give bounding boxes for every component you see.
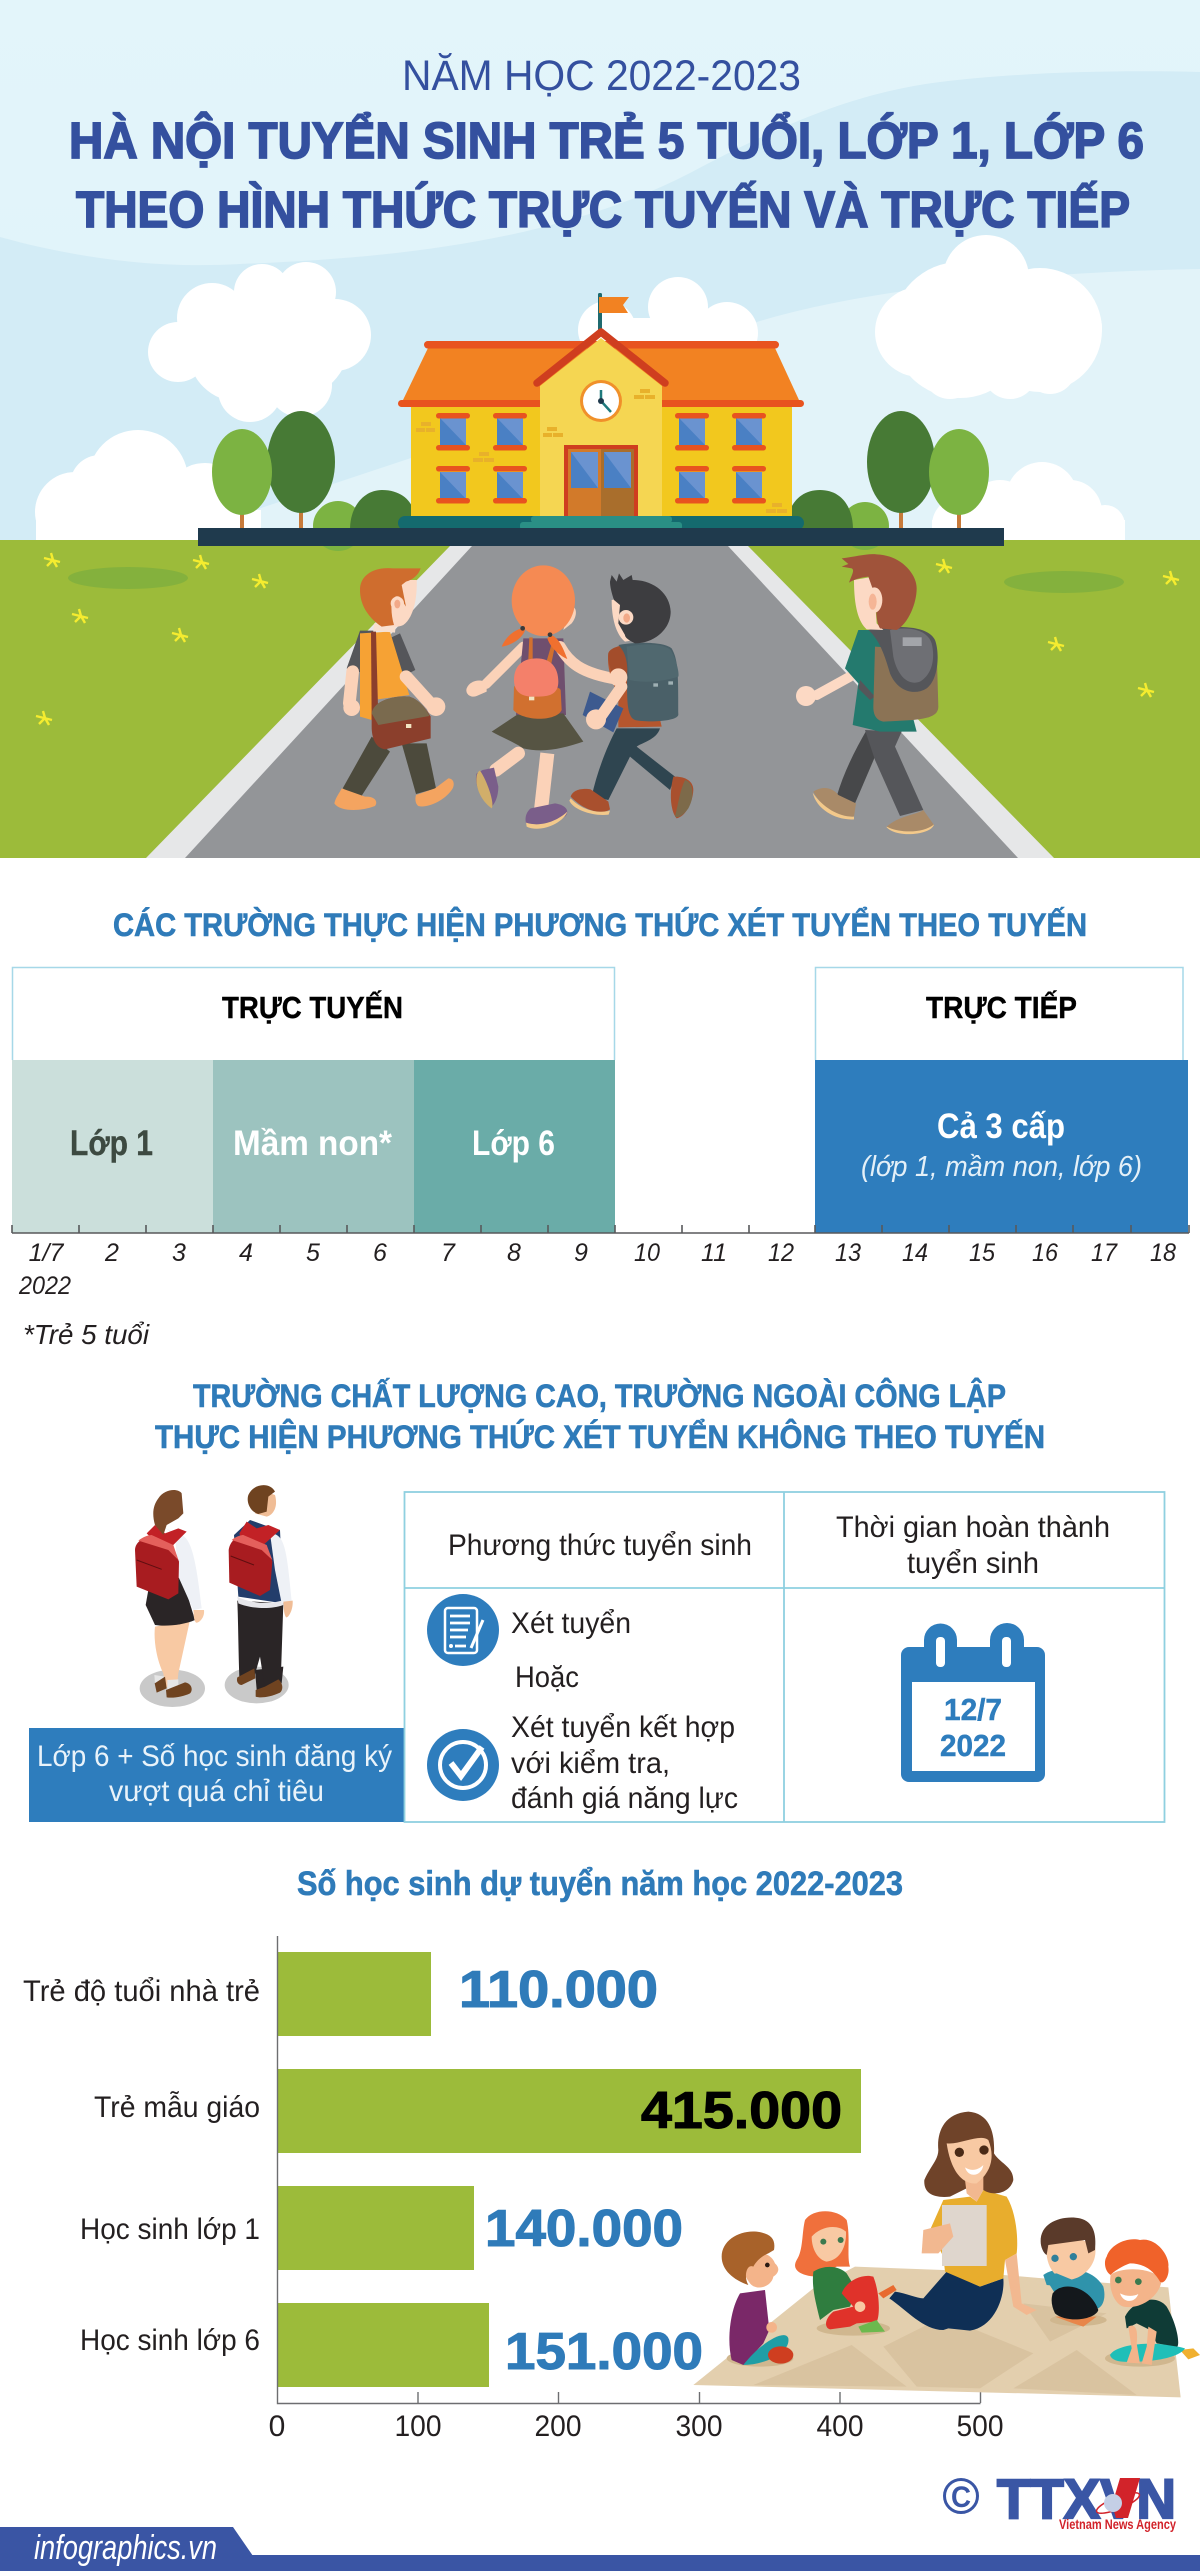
table header: method: Phương thức tuyển sinh: [448, 1529, 752, 1562]
bar: grade 1: [80, 2186, 683, 2270]
timeline dates: 15: [969, 1239, 995, 1267]
copyright mark: [944, 2480, 978, 2514]
footer band: [0, 2527, 1200, 2571]
student: boy with orange hair: [334, 568, 454, 810]
x axis labels: 400: [816, 2410, 864, 2443]
bar: grade 1: [12, 1060, 213, 1233]
timeline dates: 9: [574, 1239, 588, 1267]
bar: preschool: Mầm non*: [233, 1124, 392, 1163]
bar: preschool: [213, 1060, 414, 1233]
timeline dates: 1/7: [29, 1239, 64, 1267]
bar: grade 6: [414, 1060, 615, 1233]
timeline dates: 16: [1032, 1239, 1058, 1267]
panel: online admission timeline: [12, 968, 615, 1233]
icon: calendar with deadline: 12/7: [944, 1692, 1002, 1727]
x axis labels: [269, 2410, 1004, 2443]
wordmark: TTXVN: [997, 2467, 1176, 2530]
icon: document: [427, 1594, 499, 1666]
bar: all three levels: [815, 1060, 1188, 1233]
section heading: by zone: CÁC TRƯỜNG THỰC HIỆN PHƯƠNG THỨC XÉT TUYỂN THEO TUYẾN: [113, 907, 1087, 943]
bar: kindergarten: 415.000: [641, 2082, 842, 2140]
method: direct review: Xét tuyển: [511, 1607, 631, 1640]
icon: check mark: [427, 1729, 499, 1801]
x axis labels: 100: [394, 2410, 442, 2443]
x axis labels: 200: [534, 2410, 582, 2443]
table header: deadline: Thời gian hoàn thành: [836, 1511, 1110, 1544]
cloud: lower right: [932, 462, 1125, 553]
timeline dates: 12: [768, 1239, 794, 1267]
label: online: TRỰC TUYẾN: [222, 990, 403, 1025]
footer site name: infographics.vn: [34, 2529, 217, 2567]
callout: grade 6 oversubscribed: vượt quá chỉ tiêu: [109, 1775, 324, 1808]
student: boy with black hair: [569, 573, 693, 818]
icon: calendar with deadline: [901, 1623, 1045, 1782]
illustration: two students with red backpacks: [135, 1485, 293, 1707]
title line 1: HÀ NỘI TUYỂN SINH TRẺ 5 TUỔI, LỚP 1, LỚP 6: [69, 111, 1144, 169]
cloud: lower left: [35, 430, 261, 552]
trees left: [212, 411, 413, 551]
child: girl in green: [795, 2211, 897, 2336]
timeline dates: 11: [701, 1239, 727, 1267]
x axis labels: 500: [956, 2410, 1004, 2443]
red V stroke and globe emblem: [1094, 2478, 1142, 2518]
x axis labels: 0: [269, 2410, 285, 2443]
timeline dates: 7: [441, 1239, 456, 1267]
chart axes: [278, 1936, 980, 2404]
timeline dates: [18, 1239, 1176, 1300]
bar: grade 1: Lớp 1: [70, 1124, 153, 1163]
table: admission method and deadline: [404, 1492, 1165, 1822]
x axis labels: 300: [676, 2410, 722, 2443]
cloud: behind school: [578, 277, 758, 364]
child: boy in teal sweater: [1041, 2218, 1107, 2327]
bar: grade 6: [80, 2303, 703, 2387]
cloud: upper right: [875, 235, 1102, 399]
timeline dates: 17: [1091, 1239, 1118, 1267]
callout: grade 6 oversubscribed: Lớp 6 + Số học sinh đăng ký: [37, 1740, 392, 1773]
bar: grade 1: 140.000: [485, 2200, 683, 2258]
bar: nursery: [23, 1952, 658, 2036]
footnote: *Trẻ 5 tuổi: [23, 1319, 150, 1350]
student: boy with teal shirt: [796, 554, 938, 834]
timeline dates: 14: [902, 1239, 928, 1267]
bar chart: number of applicants: [23, 1936, 1004, 2443]
timeline dates: 4: [239, 1239, 253, 1267]
grass patches: [68, 567, 1124, 593]
teacher: [889, 2112, 1037, 2331]
copyright mark: C: [951, 2481, 971, 2514]
method: or: Hoặc: [515, 1661, 579, 1694]
label: in person: TRỰC TIẾP: [926, 990, 1077, 1025]
timeline dates: 10: [634, 1239, 660, 1267]
timeline dates: 5: [306, 1239, 320, 1267]
callout: grade 6 oversubscribed: [29, 1728, 404, 1822]
logo: TTXVN: [944, 2467, 1176, 2532]
title line: school year: NĂM HỌC 2022-2023: [402, 52, 801, 100]
timeline dates: 2022: [18, 1272, 71, 1300]
section heading: high quality schools: THỰC HIỆN PHƯƠNG THỨC XÉT TUYỂN KHÔNG THEO TUYẾN: [155, 1419, 1045, 1455]
bar: nursery: Trẻ độ tuổi nhà trẻ: [23, 1975, 260, 2008]
trees right: [790, 411, 989, 550]
road: [146, 546, 1054, 858]
timeline dates: 8: [507, 1239, 521, 1267]
timeline dates: 18: [1150, 1239, 1176, 1267]
grass: [0, 540, 1200, 858]
child: boy in purple: [722, 2231, 793, 2367]
timeline dates: 2: [104, 1239, 119, 1267]
timeline dates: 13: [835, 1239, 861, 1267]
icon: calendar with deadline: 2022: [940, 1728, 1006, 1763]
method: combined review: [511, 1711, 738, 1815]
bar: grade 1: Học sinh lớp 1: [80, 2213, 260, 2246]
timeline axis: [12, 1225, 1189, 1233]
child: boy with orange curly hair: [1105, 2239, 1200, 2367]
panel: in-person admission: [815, 968, 1188, 1233]
table header: deadline: [836, 1511, 1110, 1580]
method: combined review: đánh giá năng lực: [511, 1782, 738, 1815]
school door: [564, 445, 638, 517]
bar: grade 6: 151.000: [505, 2323, 703, 2381]
bar: all three levels: (lớp 1, mầm non, lớp 6): [861, 1151, 1142, 1183]
method: combined review: Xét tuyển kết hợp: [511, 1711, 735, 1744]
timeline dates: 3: [172, 1239, 186, 1267]
table header: deadline: tuyển sinh: [907, 1547, 1039, 1580]
bar: kindergarten: [94, 2069, 861, 2153]
illustration: teacher and children on rug: [693, 2112, 1200, 2397]
school building: [198, 293, 1004, 546]
method: combined review: với kiểm tra,: [511, 1747, 670, 1780]
main title: [69, 52, 1144, 238]
bar: grade 6: Học sinh lớp 6: [80, 2324, 260, 2357]
bar: grade 6: Lớp 6: [472, 1124, 555, 1163]
flowers: [36, 553, 1179, 725]
timeline dates: 6: [373, 1239, 387, 1267]
student: girl with orange hair: [466, 565, 618, 829]
section heading: high quality schools: TRƯỜNG CHẤT LƯỢNG CAO, TRƯỜNG NGOÀI CÔNG LẬP: [193, 1378, 1006, 1414]
section heading: high quality schools: [155, 1378, 1045, 1455]
tagline: Vietnam News Agency: [1059, 2517, 1176, 2532]
bar: kindergarten: Trẻ mẫu giáo: [94, 2091, 260, 2124]
cloud: upper left: [148, 262, 371, 422]
school windows: [436, 413, 766, 504]
bar: nursery: 110.000: [459, 1961, 658, 2019]
bar: all three levels: Cả 3 cấp: [937, 1107, 1065, 1146]
chart heading: Số học sinh dự tuyển năm học 2022-2023: [297, 1865, 903, 1903]
